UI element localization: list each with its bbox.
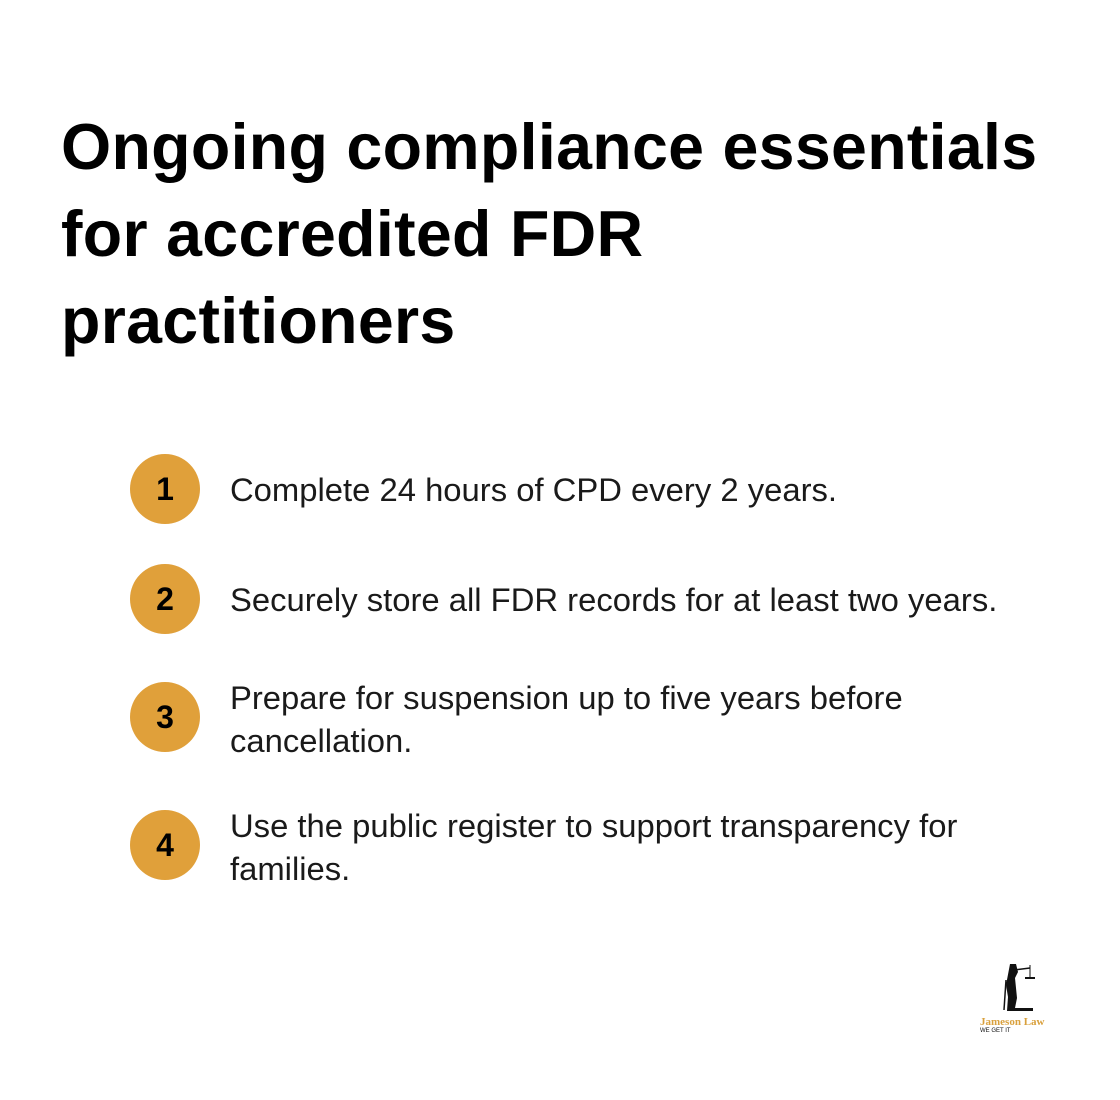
text 4 (230, 807, 957, 887)
logo (980, 964, 1044, 1034)
text 3: Prepare for suspension up to five years before (230, 679, 903, 716)
badge 2 (130, 564, 200, 634)
item 3 (130, 679, 903, 759)
badge 2: 2 (156, 581, 174, 617)
text 1: Complete 24 hours of CPD every 2 years. (230, 471, 837, 508)
item 1 (130, 454, 837, 524)
item 4 (130, 807, 957, 887)
logo: WE GET IT (980, 1028, 1011, 1034)
logo text: Jameson Law (980, 1016, 1044, 1028)
title (61, 111, 1037, 357)
text 4: Use the public register to support transparency for (230, 807, 957, 844)
badge 1: 1 (156, 471, 174, 507)
badge 4 (130, 810, 200, 880)
badge 1 (130, 454, 200, 524)
badge 4: 4 (156, 827, 174, 863)
text 3: cancellation. (230, 722, 412, 759)
text 3 (230, 679, 903, 759)
title: Ongoing compliance essentials (61, 111, 1037, 183)
item 2 (130, 564, 997, 634)
badge 3: 3 (156, 699, 174, 735)
title: for accredited FDR (61, 198, 643, 270)
logo icon (1003, 964, 1035, 1011)
title: practitioners (61, 285, 456, 357)
text 4: families. (230, 850, 350, 887)
text 2: Securely store all FDR records for at least two years. (230, 581, 997, 618)
badge 3 (130, 682, 200, 752)
